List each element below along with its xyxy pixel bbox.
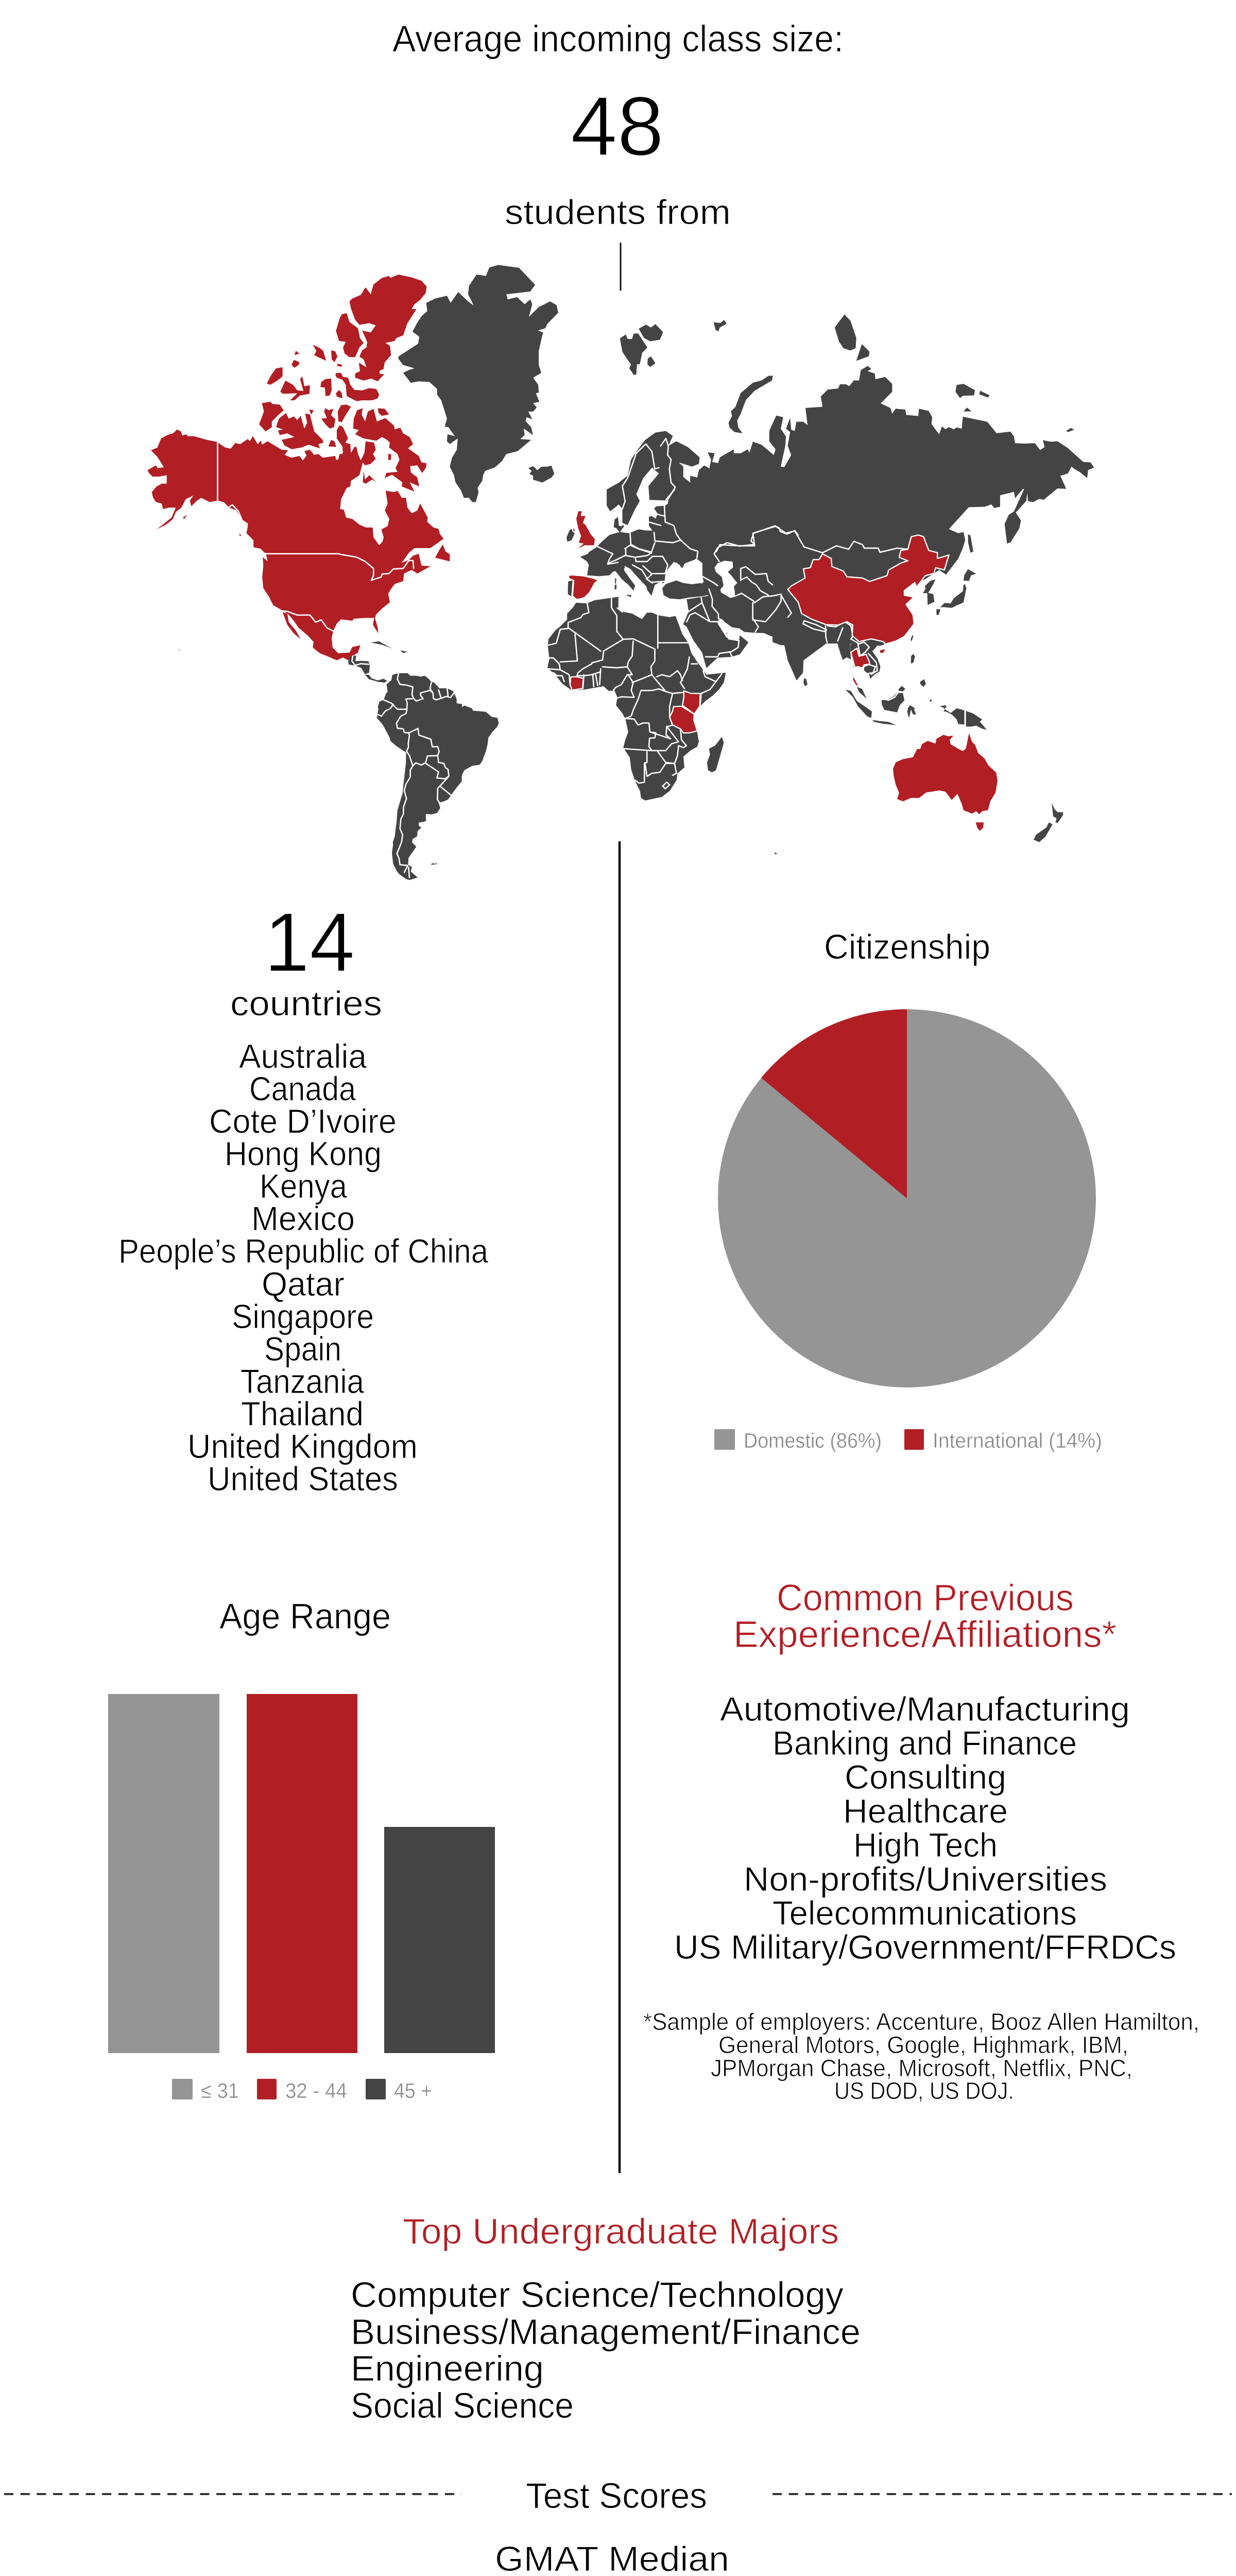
list of majors: Business/Management/Finance (351, 2312, 861, 2352)
India and Indochina (772, 618, 881, 681)
heading: Common Previous Experience: Common Previous (777, 1578, 1074, 1619)
Indonesia and Philippines (846, 654, 932, 725)
map: South and Central America (348, 656, 499, 880)
Turkey (662, 581, 708, 599)
Caribbean islands (371, 641, 407, 653)
list of countries: People’s Republic of China (118, 1232, 488, 1270)
panel: 14 countries (118, 895, 488, 1498)
Asia borders (803, 621, 898, 700)
bar: 32 to 44 (247, 1694, 357, 2053)
Tanzania (670, 706, 697, 733)
list of majors (351, 2275, 861, 2426)
list of countries: Cote D’Ivoire (209, 1102, 397, 1140)
Cote d'Ivoire (570, 676, 583, 690)
list of countries (118, 1037, 488, 1498)
Baja California (283, 612, 301, 639)
Sri Lanka (803, 679, 808, 686)
panel: age range bar chart (108, 1596, 495, 2103)
map: South and Southeast Asia, Oceania (772, 569, 1063, 854)
list of countries: Australia (239, 1037, 367, 1075)
age legend (172, 2079, 432, 2103)
title: average incoming class size: Average incoming class size: (392, 19, 844, 60)
list of countries: Hong Kong (225, 1134, 382, 1173)
age legend: 45 + (394, 2079, 432, 2103)
map: Eurasia (607, 314, 1094, 646)
text: countries: countries (230, 984, 382, 1023)
age legend: 32 - 44 (285, 2079, 347, 2103)
age legend: ≤ 31 (201, 2079, 239, 2103)
small South Atlantic island (775, 852, 778, 854)
borders: USA, Canada, Mexico (217, 442, 414, 631)
Korea (923, 580, 935, 605)
list of industries: Consulting (845, 1758, 1006, 1796)
New Guinea (939, 705, 987, 730)
South America borders (352, 656, 454, 877)
New Zealand (1034, 803, 1063, 842)
Malay peninsula (857, 687, 867, 699)
footnote: sample of employers (643, 2008, 1199, 2104)
panel: top undergraduate majors (351, 2211, 861, 2426)
list of industries (674, 1690, 1176, 1966)
list of countries: Singapore (232, 1297, 374, 1335)
pie chart (718, 1009, 1096, 1387)
list of countries: Qatar (262, 1265, 345, 1303)
Caspian Sea (714, 561, 737, 599)
Arctic Canada islands (179, 275, 450, 651)
list of majors: Engineering (351, 2348, 544, 2388)
Greenland (399, 265, 558, 502)
number: 14: 14 (264, 895, 355, 989)
footnote: sample of employers: General Motors, Google, Highmark, IBM, (718, 2031, 1128, 2058)
list of majors: Social Science (351, 2385, 574, 2426)
map: North America and Greenland (147, 265, 558, 660)
footnote: sample of employers: JPMorgan Chase, Microsoft, Netflix, PNC, (711, 2055, 1132, 2081)
island: Ireland (566, 529, 575, 542)
map: Europe and Middle East (566, 489, 798, 668)
heading: Common Previous Experience (733, 1578, 1117, 1655)
number: 48: 48 (571, 79, 664, 173)
Persian Gulf (718, 618, 743, 635)
China mainland (788, 535, 949, 644)
map: Africa and Madagascar (547, 597, 726, 801)
bar: 45 and over (384, 1827, 495, 2053)
Arctic islands (620, 314, 1074, 433)
Taiwan (911, 635, 914, 642)
list of countries: United States (208, 1460, 398, 1498)
list of countries: Canada (249, 1070, 356, 1108)
Tasmania (976, 822, 984, 831)
Scandinavia borders (622, 438, 675, 509)
connector line above map (620, 243, 621, 291)
panel: citizenship pie chart (714, 927, 1102, 1452)
Spain (568, 575, 599, 600)
Thailand (851, 648, 870, 668)
islands: Sardinia, Corsica, Sicily (614, 578, 631, 597)
heading: Common Previous Experience: Experience/Affiliations* (733, 1614, 1117, 1655)
list of countries: United Kingdom (187, 1427, 418, 1465)
panel: common previous experience (643, 1578, 1199, 2104)
list of countries: Thailand (241, 1395, 364, 1433)
list of majors: Computer Science/Technology (351, 2275, 844, 2315)
heading: Test Scores: Test Scores (526, 2476, 707, 2516)
Russia, Mongolia and Kazakhstan borders (716, 527, 908, 553)
heading: Citizenship: Citizenship (824, 927, 990, 967)
southern Thailand strip (853, 677, 859, 686)
list of industries: Non-profits/Universities (744, 1860, 1107, 1898)
map: China (622, 438, 949, 653)
list of industries: High Tech (853, 1826, 998, 1864)
list of countries: Tanzania (241, 1362, 364, 1400)
South America landmass (377, 673, 499, 880)
bar: 31 and under (108, 1694, 219, 2053)
list of industries: Banking and Finance (772, 1724, 1077, 1762)
Iceland (528, 466, 554, 483)
list of industries: Telecommunications (772, 1894, 1077, 1932)
list of countries: Spain (264, 1330, 341, 1368)
list of countries: Mexico (251, 1199, 355, 1238)
Madagascar (707, 737, 724, 772)
list of industries: Automotive/Manufacturing (720, 1690, 1130, 1728)
list of industries: Healthcare (843, 1792, 1008, 1830)
Australia (893, 733, 998, 814)
pie legend: International (14%) (933, 1429, 1102, 1452)
text: students from: students from (505, 193, 731, 232)
Russia, Central and East Asia (607, 366, 1094, 646)
Arabia and Iran (683, 583, 784, 668)
Japan (936, 569, 976, 615)
Africa borders (547, 598, 722, 789)
United Kingdom (573, 511, 595, 549)
Black Sea (664, 561, 704, 585)
Kenya (682, 691, 700, 714)
Hainan (880, 649, 885, 653)
list of industries: US Military/Government/FFRDCs (674, 1928, 1176, 1966)
list of countries: Kenya (260, 1167, 347, 1205)
Europe landmass (580, 500, 699, 596)
Canada, USA and Mexico (147, 429, 443, 660)
footnote: sample of employers: *Sample of employers: Accenture, Booz Allen Hamilton, (643, 2008, 1199, 2035)
Sakhalin (968, 488, 1028, 553)
Denmark (614, 517, 624, 532)
pie legend (714, 1429, 1102, 1452)
center divider line (619, 841, 621, 2173)
heading: Age Range: Age Range (219, 1596, 391, 1636)
world map (147, 265, 1094, 880)
footnote: sample of employers: US DOD, US DOJ. (834, 2077, 1014, 2104)
Europe, Caucasus and Middle East borders (596, 489, 798, 657)
heading: Top Undergraduate Majors: Top Undergraduate Majors (403, 2211, 839, 2251)
pie legend: Domestic (86%) (744, 1429, 882, 1452)
Portugal (568, 581, 573, 596)
